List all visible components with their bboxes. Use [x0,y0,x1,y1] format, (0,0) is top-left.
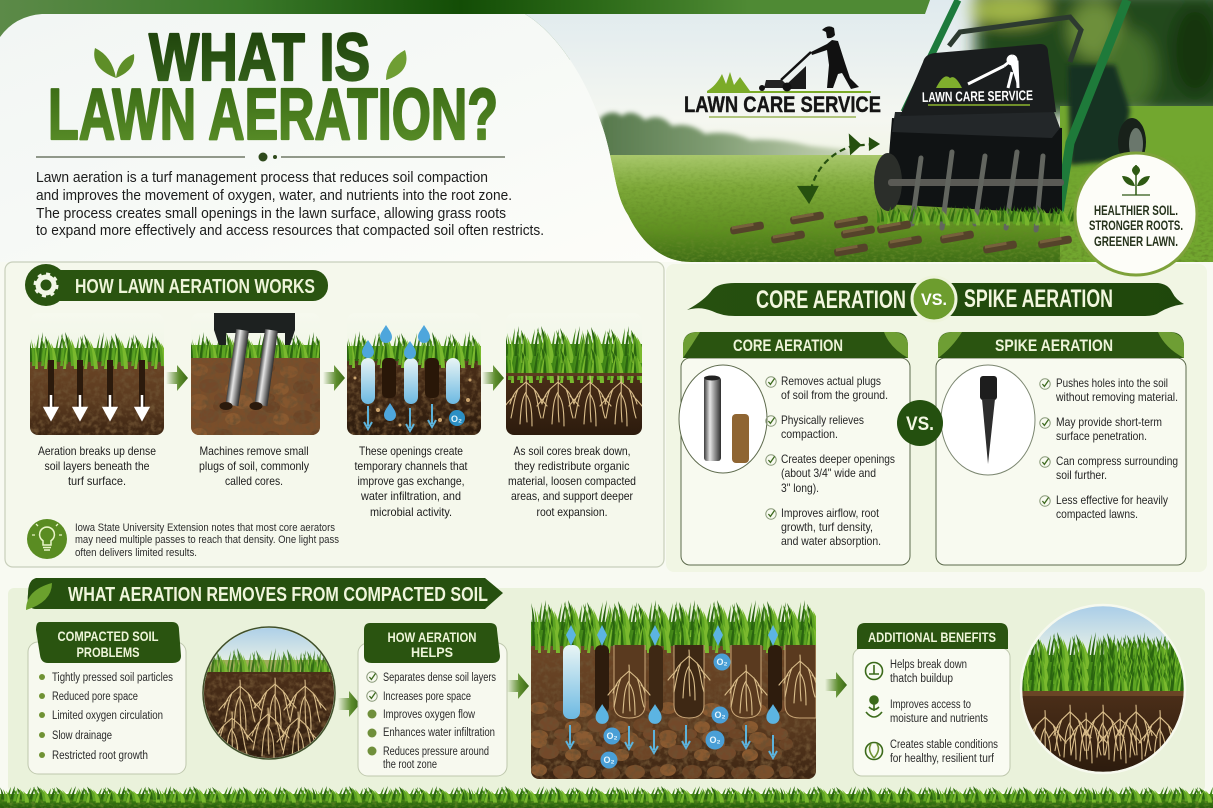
helps list: Separates dense soil layers [383,672,496,684]
card: how aeration helps [358,623,507,776]
caption 2: plugs of soil, commonly [199,459,309,473]
machine logo panel [900,44,1056,116]
bottom grass strip [0,786,1213,808]
badge text: GREENER LAWN. [1094,233,1178,249]
caption 4: areas, and support deeper [511,489,633,503]
comparison banner: SPIKE AERATION [964,285,1113,313]
illustration: compacted soil circle [202,626,336,760]
badge text [1089,202,1183,249]
caption 4: root expansion. [536,505,608,519]
logo: Lawn Care Service: LAWN CARE SERVICE [684,92,881,117]
panel: what aeration removes [8,578,1213,792]
VS circle: VS. [906,414,934,435]
helps list: Increases pore space [383,691,471,703]
step 1 illustration [30,332,164,435]
dashed arrow [799,136,878,202]
soil plugs on the lawn [730,211,1072,257]
problem list [39,672,173,762]
comparison banner [687,277,1184,321]
arrow [507,673,529,699]
problem list: Restricted root growth [52,750,148,762]
caption 3: temporary channels that [354,459,468,473]
card: core aeration [679,332,910,565]
core checklist: of soil from the ground. [781,388,888,402]
benefits list: thatch buildup [890,673,953,685]
intro paragraph: to expand more effectively and access resources that compacted soil often restricts. [36,223,544,239]
core checklist: compaction. [781,427,838,441]
hero photo: lawn and aerator machine [500,0,1213,262]
card header: HOW AERATION [388,629,476,645]
illustration: healthy turf circle [1020,604,1186,774]
core checklist: (about 3/4" wide and [781,466,876,480]
caption 1: Aeration breaks up dense [38,444,156,458]
caption 4: As soil cores break down, [514,444,630,458]
machine logo panel: LAWN CARE SERVICE [922,87,1033,105]
illustration: aerated soil cross-section [527,600,840,779]
step 3 illustration [347,325,481,435]
top green bar [0,0,960,60]
caption 1 [38,444,156,488]
card header [857,623,1008,649]
core checklist: Improves airflow, root [781,506,880,520]
panel: core vs spike [666,264,1207,572]
card header: ADDITIONAL BENEFITS [868,629,996,645]
problem list: Tightly pressed soil particles [52,672,173,684]
core checklist: Creates deeper openings [781,452,895,466]
illustration: core tine and plug [679,365,767,473]
card header [683,332,908,358]
section heading: WHAT AERATION REMOVES FROM COMPACTED SOIL [68,584,488,606]
card: additional benefits [853,623,1010,776]
core checklist: growth, turf density, [781,520,873,534]
core checklist: 3" long). [781,481,819,495]
helps list [367,672,496,771]
benefits list: Creates stable conditions [890,739,998,751]
helps list: Improves oxygen flow [383,709,476,721]
oxygen bubbles: O₂ [604,755,615,765]
caption 2: called cores. [225,474,283,488]
core checklist: Physically relieves [781,413,864,427]
caption 3: improve gas exchange, [358,474,464,488]
card header: PROBLEMS [76,644,140,660]
icon: plant [1122,165,1150,195]
spike checklist: Can compress surrounding [1056,454,1178,468]
arrow [825,672,847,698]
benefits list: Helps break down [890,659,967,671]
spike checklist: surface penetration. [1056,429,1147,443]
icons [866,662,882,760]
caption 4: they redistribute organic [514,459,630,473]
core checklist: and water absorption. [781,534,881,548]
intro paragraph: Lawn aeration is a turf management process that reduces soil compaction [36,170,488,186]
arrow [338,691,360,717]
section heading [26,578,503,610]
card: spike aeration [936,332,1186,565]
tip note [75,522,339,559]
title divider [36,152,505,162]
VS circle [897,400,943,446]
aerator deck [874,112,1064,214]
caption 3 [354,444,468,519]
oxygen bubbles: O₂ [716,657,728,667]
comparison banner: CORE AERATION [756,286,906,314]
helps list: the root zone [383,759,437,771]
benefits list: Improves access to [890,699,971,711]
oxygen bubbles [600,654,730,768]
leaf icons beside title [94,48,406,80]
aerator tines [912,152,1043,230]
caption 1: turf surface. [68,474,126,488]
card header: HELPS [411,644,453,660]
badge: healthier soil [1075,153,1197,275]
intro paragraph: The process creates small openings in the lawn surface, allowing grass roots [36,206,506,222]
spike checklist [1040,376,1178,521]
heading pill: HOW LAWN AERATION WORKS [75,276,315,298]
oxygen bubbles: O₂ [606,731,618,741]
card: compacted soil problems [28,622,186,774]
oxygen bubbles: O₂ [710,735,721,745]
panel: how lawn aeration works [5,262,664,567]
flow arrows [566,725,777,758]
arrow [323,365,345,391]
caption 3: water infiltration, and [360,489,461,503]
caption 4: material, loosen compacted [508,474,636,488]
card header [36,622,181,663]
caption 2: Machines remove small [200,444,308,458]
logo: Lawn Care Service [684,26,881,117]
step 4 illustration [506,326,642,435]
illustration: spike tine [941,365,1035,475]
caption 1: soil layers beneath the [44,459,150,473]
comparison banner: VS. [921,290,947,309]
intro paragraph [36,170,544,239]
card header: COMPACTED SOIL [58,628,159,644]
helps list: Enhances water infiltration [383,727,495,739]
intro paragraph: and improves the movement of oxygen, water, and nutrients into the root zone. [36,188,512,204]
tip note: often delivers limited results. [75,547,197,559]
card header: SPIKE AERATION [995,336,1113,355]
caption 3: These openings create [359,444,463,458]
title [48,20,498,155]
intro white panel [0,14,690,262]
spike checklist: compacted lawns. [1056,507,1138,521]
arrow [166,365,188,391]
lawn blades at machine base [876,205,1074,226]
problem list: Slow drainage [52,730,112,742]
aeration channels [563,645,821,719]
title: WHAT IS [149,20,370,95]
benefits list: moisture and nutrients [890,713,988,725]
benefits list [890,659,998,765]
problem list: Limited oxygen circulation [52,710,163,722]
problem list: Reduced pore space [52,691,138,703]
oxygen bubbles: O₂ [714,710,726,720]
wheel and rear body [1068,65,1146,166]
caption 2 [199,444,309,488]
benefits list: for healthy, resilient turf [890,753,995,765]
arrow [482,365,504,391]
icon: light bulb [27,519,67,559]
badge text: HEALTHIER SOIL. [1094,202,1178,218]
heading pill [25,264,328,306]
spike checklist: soil further. [1056,468,1107,482]
spike checklist: Less effective for heavily [1056,493,1168,507]
caption 4 [508,444,636,519]
spike checklist: without removing material. [1055,390,1178,404]
helps list: Reduces pressure around [383,746,489,758]
card header: CORE AERATION [733,336,843,355]
spike checklist: Pushes holes into the soil [1056,376,1168,390]
step 3 illustration: O₂ [451,414,462,424]
tip note: may need multiple passes to reach that density. One light pass [75,534,339,546]
core checklist: Removes actual plugs [781,374,881,388]
card header [364,623,500,663]
card header [938,332,1184,358]
spike checklist: May provide short-term [1056,415,1162,429]
water markers [566,625,780,724]
core checklist [766,374,895,548]
caption 3: microbial activity. [370,505,452,519]
aerator handle bars [904,0,1127,213]
title: LAWN AERATION? [48,75,498,155]
tip note: Iowa State University Extension notes that most core aerators [75,522,335,534]
step 2 illustration [191,313,320,435]
step captions [38,444,636,519]
